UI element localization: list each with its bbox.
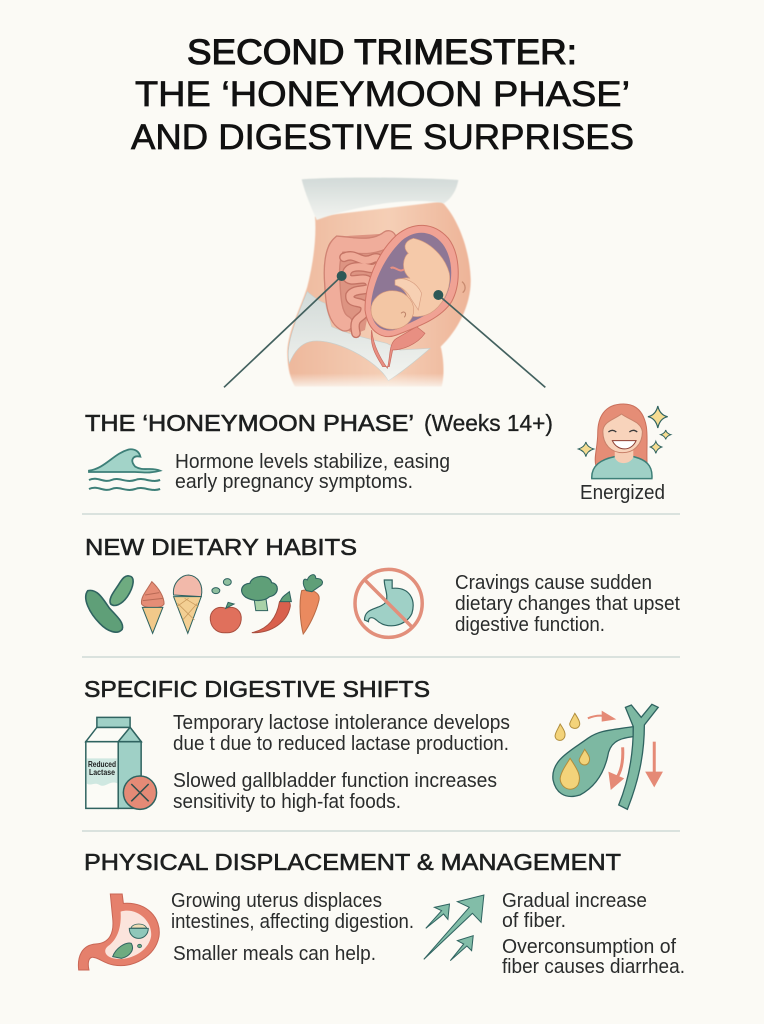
text: gradual fiber: Gradual increase xyxy=(502,890,647,912)
heading: specific digestive shifts: SPECIFIC DIGESTIVE SHIFTS xyxy=(84,676,430,702)
text: cravings: Cravings cause sudden xyxy=(455,572,652,594)
icon: stomach with food xyxy=(78,894,159,970)
icon: x badge xyxy=(123,776,157,809)
cucumber large xyxy=(86,590,123,632)
text: overconsumption: fiber causes diarrhea. xyxy=(502,956,685,978)
text: smaller meals: Smaller meals can help. xyxy=(173,943,376,965)
leader line right xyxy=(438,295,545,387)
text: lactose xyxy=(173,712,510,755)
text: lactose: Temporary lactose intolerance develops xyxy=(173,712,510,734)
soft serve xyxy=(141,582,164,608)
text: gradual fiber xyxy=(502,890,647,932)
large intestine xyxy=(332,238,388,323)
broccoli xyxy=(254,597,268,611)
text: lactose: due t due to reduced lactase production. xyxy=(173,733,509,755)
fetus xyxy=(371,238,450,329)
icon: milk carton xyxy=(86,717,157,809)
text: hormone levels: early pregnancy symptoms. xyxy=(175,471,413,493)
icon: stomach prohibited xyxy=(355,569,422,637)
text: cravings xyxy=(455,572,680,636)
leader line left xyxy=(224,276,342,387)
ice cream cone xyxy=(173,575,202,597)
anatomical illustration: pregnant abdomen xyxy=(224,178,545,390)
title xyxy=(131,33,634,157)
title: SECOND TRIMESTER: xyxy=(187,33,577,72)
navel xyxy=(462,282,465,293)
text: gallbladder: sensitivity to high-fat foods. xyxy=(173,791,401,813)
label: reduced lactase xyxy=(88,760,116,777)
label: reduced lactase: Lactase xyxy=(89,768,115,777)
chili xyxy=(252,599,290,633)
text: cravings: dietary changes that upset xyxy=(455,593,680,615)
heading: honeymoon phase xyxy=(85,410,553,436)
icon: wave xyxy=(89,449,160,490)
title: AND DIGESTIVE SURPRISES xyxy=(131,118,634,157)
text: gallbladder: Slowed gallbladder function increases xyxy=(173,770,497,792)
text: uterus displaces xyxy=(171,890,414,933)
text: overconsumption xyxy=(502,936,685,978)
text: gradual fiber: of fiber. xyxy=(502,910,566,932)
shirt xyxy=(302,178,458,220)
heading: honeymoon phase: THE ‘HONEYMOON PHASE’ xyxy=(85,410,414,436)
icon: rising arrows xyxy=(424,895,484,961)
icon: energized woman xyxy=(578,404,671,479)
text: uterus displaces: Growing uterus displaces xyxy=(171,890,382,912)
cucumber small xyxy=(110,576,133,605)
small intestine xyxy=(344,256,380,333)
text: gallbladder xyxy=(173,770,497,813)
body skin xyxy=(287,202,471,387)
underwear xyxy=(288,292,430,381)
callout dot left xyxy=(337,271,347,281)
uterus wall xyxy=(365,225,458,337)
label: reduced lactase: Reduced xyxy=(88,760,116,769)
text: uterus displaces: intestines, affecting digestion. xyxy=(171,911,414,933)
callout dot right xyxy=(433,290,443,300)
intestine backing xyxy=(325,233,393,333)
seeds xyxy=(223,579,231,585)
bottom fade xyxy=(280,373,450,390)
text: hormone levels: Hormone levels stabilize, easing xyxy=(175,451,450,473)
heading: physical displacement: PHYSICAL DISPLACEMENT & MANAGEMENT xyxy=(84,849,621,875)
heading: honeymoon phase: (Weeks 14+) xyxy=(424,410,553,436)
icon: gallbladder xyxy=(553,704,663,809)
label: energized: Energized xyxy=(580,482,665,504)
amniotic cavity xyxy=(371,233,451,330)
icons: craving foods xyxy=(86,575,323,634)
text: cravings: digestive function. xyxy=(455,614,605,636)
apple xyxy=(210,607,241,633)
title: THE ‘HONEYMOON PHASE’ xyxy=(135,75,630,114)
birth canal xyxy=(371,327,425,368)
carrot xyxy=(300,590,319,634)
heading: new dietary habits: NEW DIETARY HABITS xyxy=(85,534,357,560)
text: overconsumption: Overconsumption of xyxy=(502,936,676,958)
text: hormone levels xyxy=(175,451,450,493)
